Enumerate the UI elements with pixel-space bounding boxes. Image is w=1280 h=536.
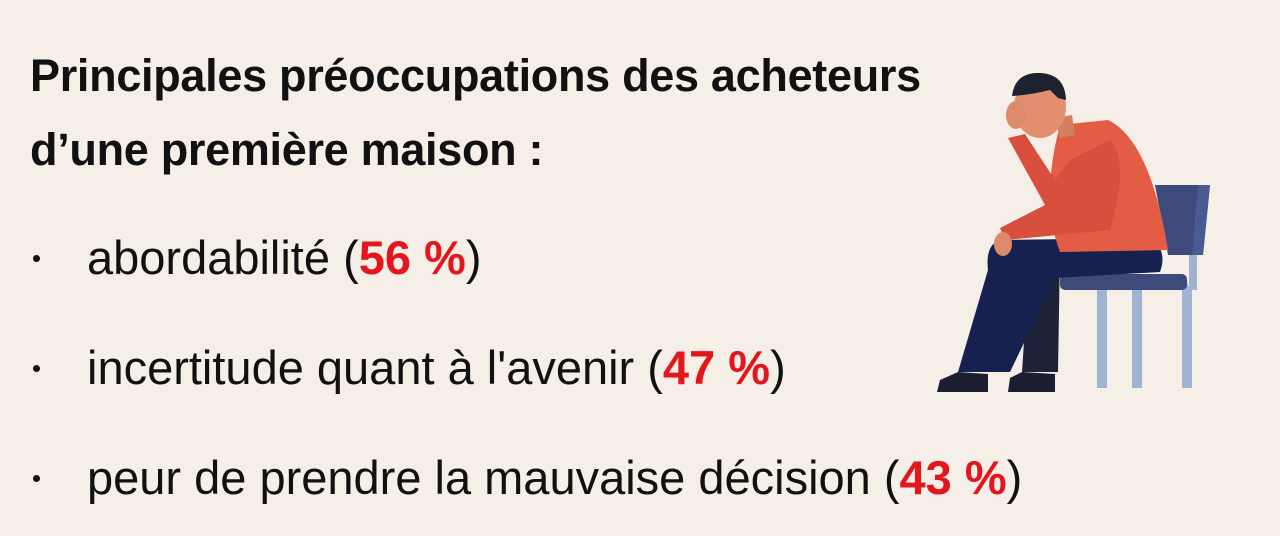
bullet: incertitude: incertitude quant à l'avenir (47 %) bbox=[87, 341, 786, 394]
title: d’une première maison : bbox=[30, 124, 543, 175]
title bbox=[30, 50, 921, 175]
bullet: peur: peur de prendre la mauvaise décision (43 %) bbox=[87, 451, 1022, 504]
title: Principales préoccupations des acheteurs bbox=[30, 50, 921, 101]
bullet: abordabilité: abordabilité (56 %) bbox=[87, 231, 482, 284]
